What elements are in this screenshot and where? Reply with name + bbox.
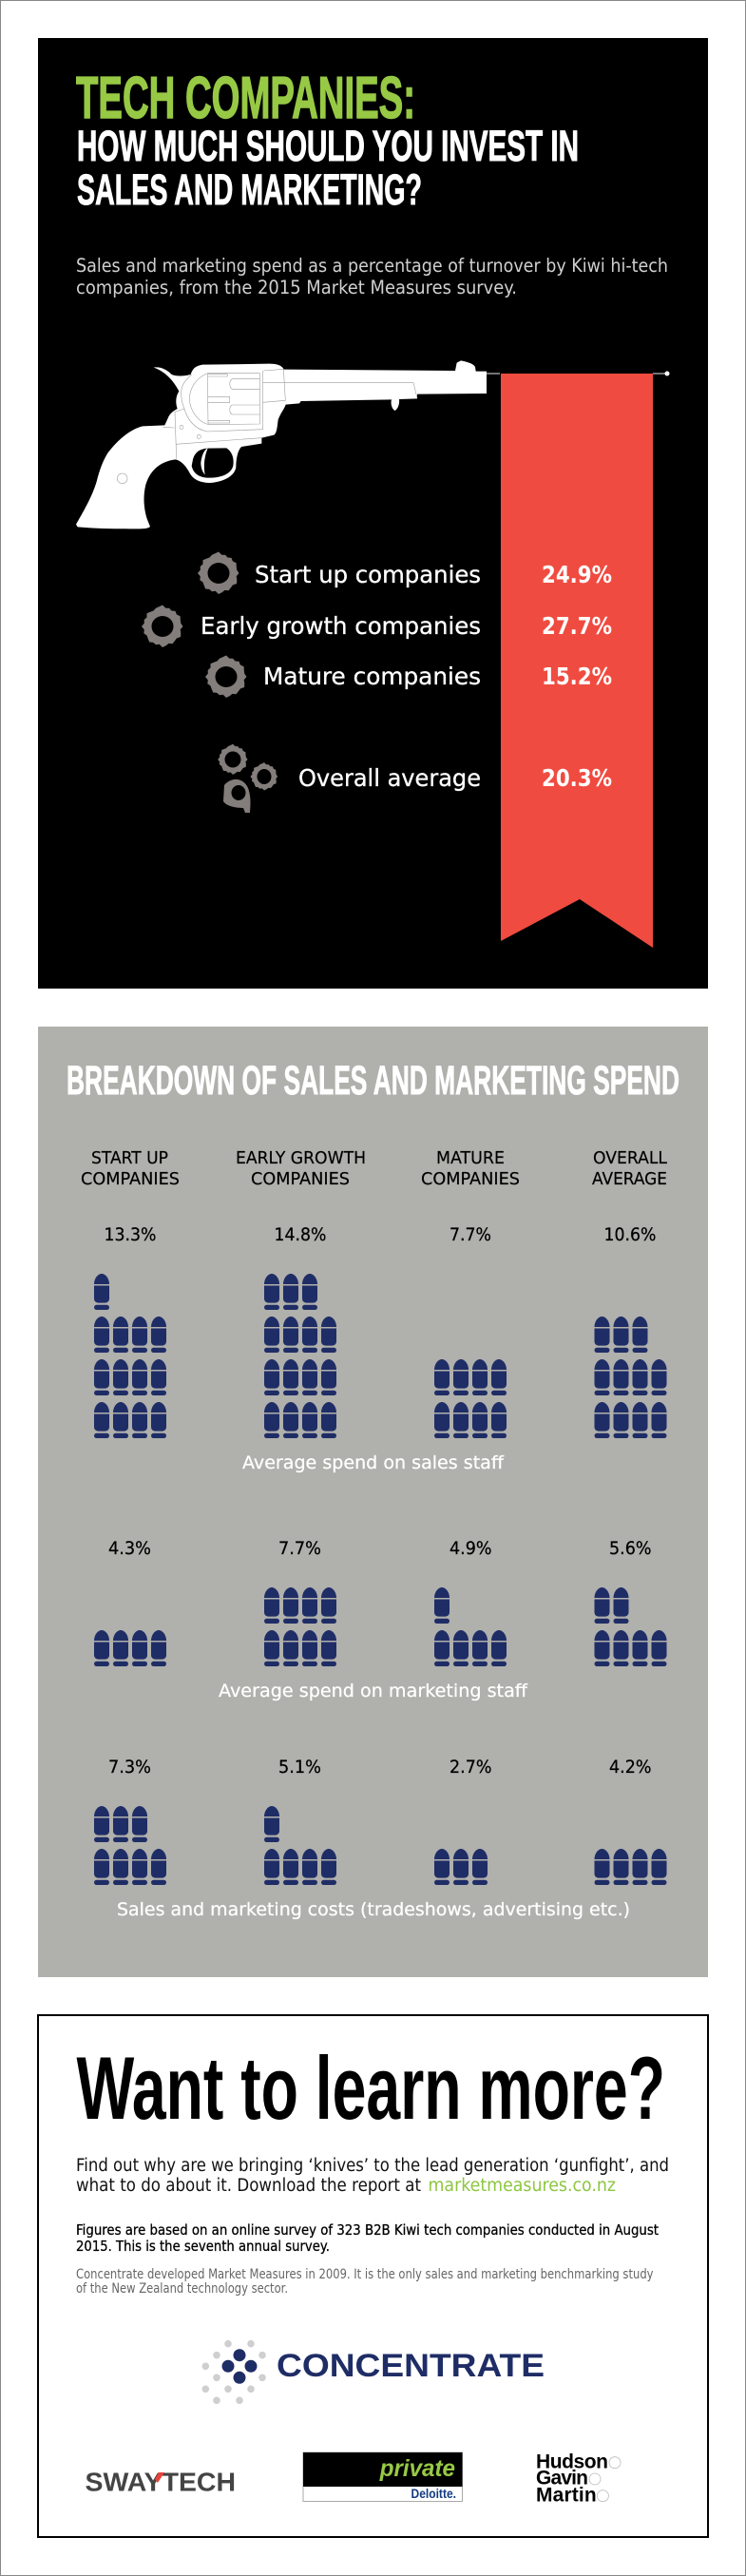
column headers: COMPANIES (251, 1170, 350, 1189)
survey note: 2015. This is the seventh annual survey. (76, 2238, 330, 2255)
row: early growth companies: Early growth companies (201, 612, 481, 640)
banner rod (487, 373, 666, 375)
call to action text: what to do about it. Download the report at (76, 2176, 421, 2196)
column headers (81, 1149, 667, 1189)
section: sales staff values: 14.8% (274, 1225, 327, 1245)
intro text: Sales and marketing spend as a percentage of turnover by Kiwi hi-tech (76, 255, 668, 277)
section: costs values (108, 1758, 652, 1778)
logo: Hudson Gavin Martin: Martin (536, 2485, 597, 2506)
row: overall average (218, 744, 612, 813)
icon: revolver (76, 360, 487, 529)
survey note: Figures are based on an online survey of 323 B2B Kiwi tech companies conducted in August (76, 2221, 659, 2239)
section: sales staff values: 13.3% (105, 1225, 156, 1245)
logo: Swaytech: SWAYTECH (86, 2468, 236, 2497)
section: marketing staff values: 7.7% (278, 1539, 321, 1559)
red ribbon banner (501, 374, 653, 948)
section: marketing staff values: 4.3% (108, 1539, 151, 1559)
intro text (76, 255, 668, 298)
column headers: START UP (91, 1149, 168, 1168)
call to action text (76, 2156, 669, 2196)
section: sales staff values: 7.7% (450, 1225, 491, 1245)
section: marketing staff values: 5.6% (609, 1539, 652, 1559)
row: overall average: Overall average (298, 764, 481, 792)
column headers: COMPANIES (421, 1170, 520, 1189)
caption: marketing staff: Average spend on marketing staff (219, 1681, 528, 1701)
logo: Hudson Gavin Martin (536, 2451, 621, 2506)
logo: Private Deloitte (303, 2452, 462, 2502)
row: overall average: 20.3% (542, 764, 612, 792)
section: marketing staff values (108, 1539, 652, 1559)
column headers: MATURE (436, 1149, 505, 1168)
section: costs values: 7.3% (108, 1758, 151, 1778)
panel: call to action (38, 2015, 708, 2537)
bullets: marketing staff (94, 1587, 667, 1666)
title: SALES AND MARKETING? (77, 165, 422, 214)
row: early growth companies (142, 605, 612, 647)
call to action text: Find out why are we bringing ‘knives’ to the lead generation ‘gunfight’, and (76, 2156, 669, 2176)
section: costs values: 4.2% (609, 1758, 652, 1778)
logo: Private Deloitte: Deloitte. (411, 2487, 456, 2501)
logo: Private Deloitte: private (379, 2455, 455, 2482)
section: sales staff values: 10.6% (604, 1225, 656, 1245)
section: sales staff values (105, 1225, 656, 1245)
about note: of the New Zealand technology sector. (76, 2281, 288, 2297)
intro text: companies, from the 2015 Market Measures survey. (76, 277, 517, 298)
bullets: costs (94, 1806, 667, 1885)
row: start up companies (198, 551, 612, 594)
row: mature companies: 15.2% (542, 663, 612, 690)
caption: costs: Sales and marketing costs (tradeshows, advertising etc.) (117, 1899, 630, 1920)
logo: Hudson Gavin Martin: Hudson (536, 2451, 608, 2473)
row: mature companies (205, 656, 612, 698)
title: TECH COMPANIES: (76, 66, 415, 131)
about note (76, 2267, 654, 2297)
survey note (76, 2221, 659, 2255)
logo: Concentrate (201, 2340, 545, 2404)
row: early growth companies: 27.7% (542, 612, 612, 640)
call to action text: marketmeasures.co.nz (428, 2176, 616, 2196)
title (76, 66, 579, 214)
row: mature companies: Mature companies (263, 663, 481, 690)
row: start up companies: Start up companies (255, 561, 481, 588)
row: start up companies: 24.9% (542, 561, 612, 588)
panel: breakdown (38, 1027, 708, 1977)
logo: Concentrate: CONCENTRATE (277, 2348, 545, 2384)
logo: Hudson Gavin Martin: Gavin (536, 2468, 588, 2489)
caption: sales staff: Average spend on sales staff (242, 1452, 505, 1473)
bullets: sales staff (94, 1274, 667, 1438)
section: marketing staff values: 4.9% (450, 1539, 492, 1559)
column headers: EARLY GROWTH (236, 1149, 366, 1168)
column headers: COMPANIES (81, 1170, 180, 1189)
panel: black intro (38, 38, 708, 989)
section: costs values: 2.7% (450, 1758, 492, 1778)
column headers: OVERALL (593, 1149, 667, 1168)
column headers: AVERAGE (592, 1170, 667, 1189)
section: costs values: 5.1% (278, 1758, 321, 1778)
